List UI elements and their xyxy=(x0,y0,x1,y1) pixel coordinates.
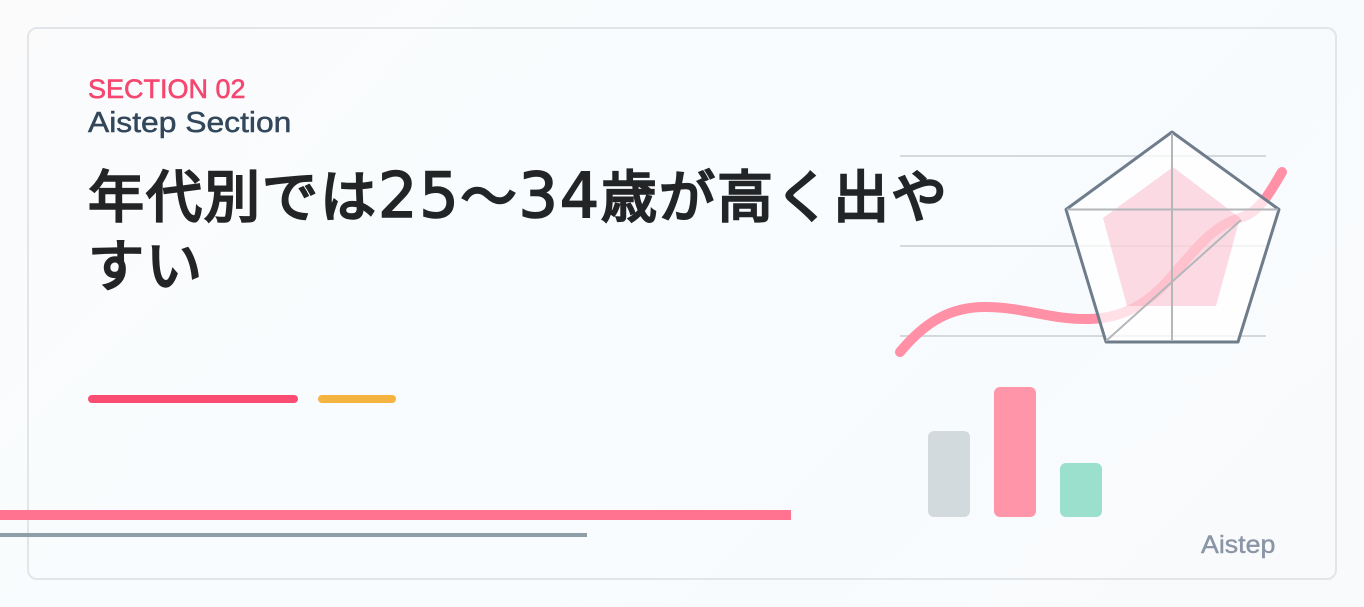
brand label: Aistep xyxy=(1201,531,1275,559)
trend curve xyxy=(900,172,1282,352)
radar data area xyxy=(1103,167,1240,306)
radar axes xyxy=(1067,133,1278,341)
bar: pink xyxy=(994,387,1036,517)
bar: grey xyxy=(928,431,970,517)
accent bar: amber xyxy=(318,395,396,403)
radar pentagon xyxy=(1066,132,1279,342)
accent bar: pink xyxy=(88,395,298,403)
bar: green xyxy=(1060,463,1102,517)
title: すい xyxy=(88,222,204,303)
bottom stripe: pink xyxy=(0,510,791,520)
section label: SECTION 02 xyxy=(88,74,246,104)
title: 年代別では25～34歳が高く出や xyxy=(88,153,949,234)
bottom stripe: grey xyxy=(0,533,587,537)
subtitle: Aistep Section xyxy=(88,107,291,139)
title xyxy=(88,153,949,303)
